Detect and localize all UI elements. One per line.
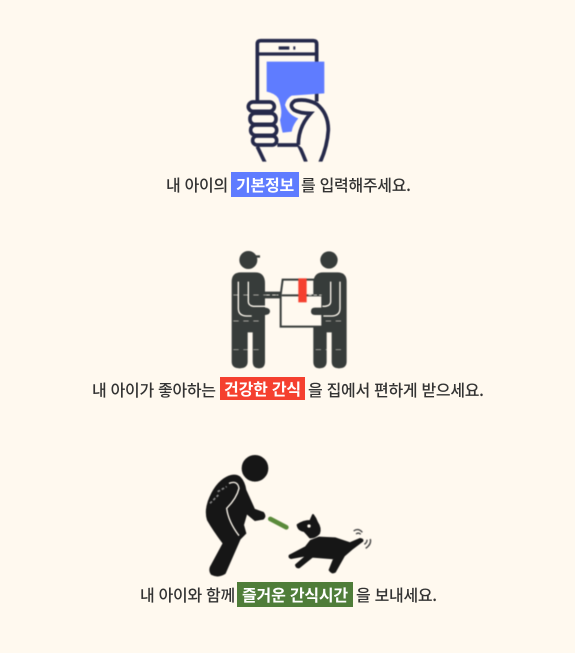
panel: step 3 fun snack time bbox=[140, 454, 437, 607]
caption: step 3: 내 아이와 함께 bbox=[140, 582, 235, 606]
caption: step 3 bbox=[140, 582, 437, 607]
caption: step 2 bbox=[92, 376, 484, 401]
highlight: basic info: 기본정보 bbox=[236, 172, 294, 196]
icon: two people exchanging box bbox=[230, 250, 348, 370]
dog bbox=[289, 515, 362, 572]
caption: step 1: 내 아이의 bbox=[166, 172, 228, 196]
icon: person playing with dog bbox=[205, 454, 372, 578]
caption: step 2: 을 집에서 편하게 받으세요. bbox=[308, 377, 484, 401]
panel: step 2 receive healthy snacks bbox=[92, 250, 484, 401]
caption: step 2: 내 아이가 좋아하는 bbox=[92, 377, 216, 401]
parcel box bbox=[281, 280, 322, 327]
highlight: healthy snack: 건강한 간식 bbox=[224, 376, 301, 400]
right person bbox=[313, 251, 347, 368]
person bbox=[206, 456, 268, 576]
caption: step 1 bbox=[166, 172, 411, 197]
left person bbox=[232, 251, 282, 368]
caption: step 3: 을 보내세요. bbox=[356, 582, 437, 606]
right person arm bbox=[311, 308, 335, 315]
motion marks bbox=[354, 530, 371, 548]
caption: step 1: 를 입력해주세요. bbox=[301, 172, 411, 196]
icon: hand holding phone bbox=[246, 38, 331, 162]
frisbee bbox=[270, 519, 286, 527]
highlight: fun snack time: 즐거운 간식시간 bbox=[242, 582, 348, 606]
panel: step 1 enter basic info bbox=[166, 38, 411, 197]
